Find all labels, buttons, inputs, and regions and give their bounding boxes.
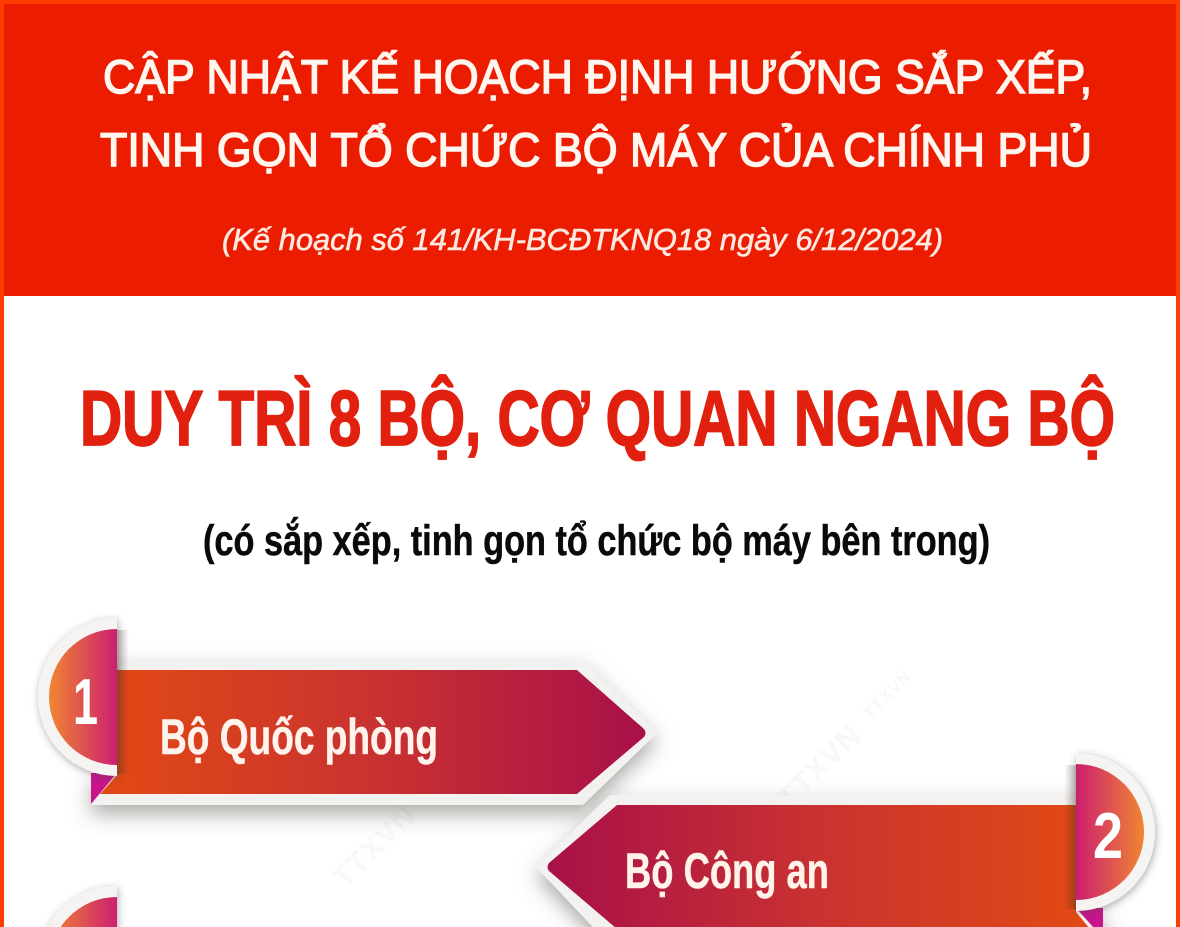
- ribbon 2 arrow bar: [548, 805, 1090, 927]
- subheading: (có sắp xếp, tinh gọn tổ chức bộ máy bên trong): [203, 516, 990, 565]
- ribbon 1: Bộ Quốc phòng: [38, 618, 657, 805]
- watermarks: [266, 666, 916, 895]
- ribbon 2 white backing: [536, 795, 1103, 927]
- watermarks: INFOGRAPHICS: [266, 669, 380, 783]
- watermarks: TTXVN: [414, 746, 471, 803]
- ribbon 2: Bộ Công an: [536, 753, 1155, 927]
- header band: [4, 4, 1176, 296]
- header subtitle: (Kế hoạch số 141/KH-BCĐTKNQ18 ngày 6/12/2024): [222, 222, 943, 257]
- watermarks: TTXVN: [859, 666, 916, 723]
- ribbon 2 magenta fold: [1076, 908, 1103, 927]
- ribbon 1 label: Bộ Quốc phòng: [160, 709, 438, 765]
- ribbon 2 badge: [1064, 753, 1155, 911]
- ribbon 1 badge: [38, 618, 129, 776]
- header title: TINH GỌN TỔ CHỨC BỘ MÁY CỦA CHÍNH PHỦ: [100, 123, 1092, 176]
- ribbon 1 magenta fold: [91, 773, 117, 804]
- ribbon 1 white backing: [91, 660, 657, 805]
- watermarks: TTXVN: [772, 719, 868, 815]
- badge number 2: 2: [1093, 799, 1123, 872]
- ribbon 1 arrow bar: [100, 670, 646, 794]
- header title: CẬP NHẬT KẾ HOẠCH ĐỊNH HƯỚNG SẮP XẾP,: [103, 50, 1092, 103]
- header title: [100, 50, 1092, 176]
- badge number 1: 1: [73, 665, 98, 738]
- ribbon 2 label: Bộ Công an: [625, 843, 829, 899]
- ribbon 3 badge (cropped): [38, 886, 117, 927]
- watermarks: TTXVN: [327, 799, 423, 895]
